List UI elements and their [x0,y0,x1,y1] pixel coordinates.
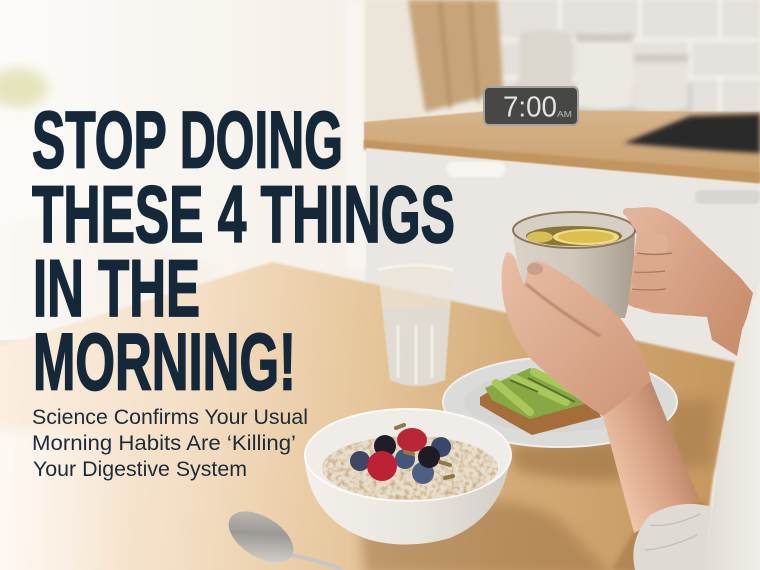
berries [350,451,370,471]
title [32,96,455,408]
kitchen counter [364,110,760,182]
bottom-left wash [0,430,130,570]
plate with avocado toast [443,357,677,447]
top wash [0,0,350,340]
canisters [514,30,692,114]
mug with lemon tea [513,212,653,318]
avocado [485,368,592,419]
plate shadow on table [510,440,625,480]
subtitle line 1: Science Confirms Your Usual [32,406,308,429]
left wall shade [0,215,220,345]
digital clock: AM [557,109,572,119]
left hand holding mug [502,252,651,416]
title line 3: IN THE [33,244,200,334]
glass of water [378,265,453,386]
subtitle [32,406,308,481]
left forearm [603,381,699,533]
toast [480,385,601,435]
cabinets [366,148,760,370]
bowl shadow on table [360,500,612,570]
blurred plant [0,68,48,108]
table [0,262,735,570]
fingers [637,233,668,254]
sink [624,114,760,153]
window sill [0,112,62,217]
title line 4: MORNING! [33,318,296,408]
spoon [220,501,342,570]
digital clock: 7:00 [503,92,557,124]
right hand holding mug [623,207,753,356]
cutting boards [408,0,503,112]
subtitle line 2: Morning Habits Are ‘Killing’ [32,432,296,455]
sleeve and shirt [633,283,760,570]
oatmeal bowl [304,409,511,545]
lower table shade [612,500,705,570]
wall tiles [495,0,760,120]
digital clock [484,87,578,125]
subtitle line 3: Your Digestive System [33,458,247,481]
title line 2: THESE 4 THINGS [32,170,455,260]
title line 1: STOP DOING [32,96,343,186]
